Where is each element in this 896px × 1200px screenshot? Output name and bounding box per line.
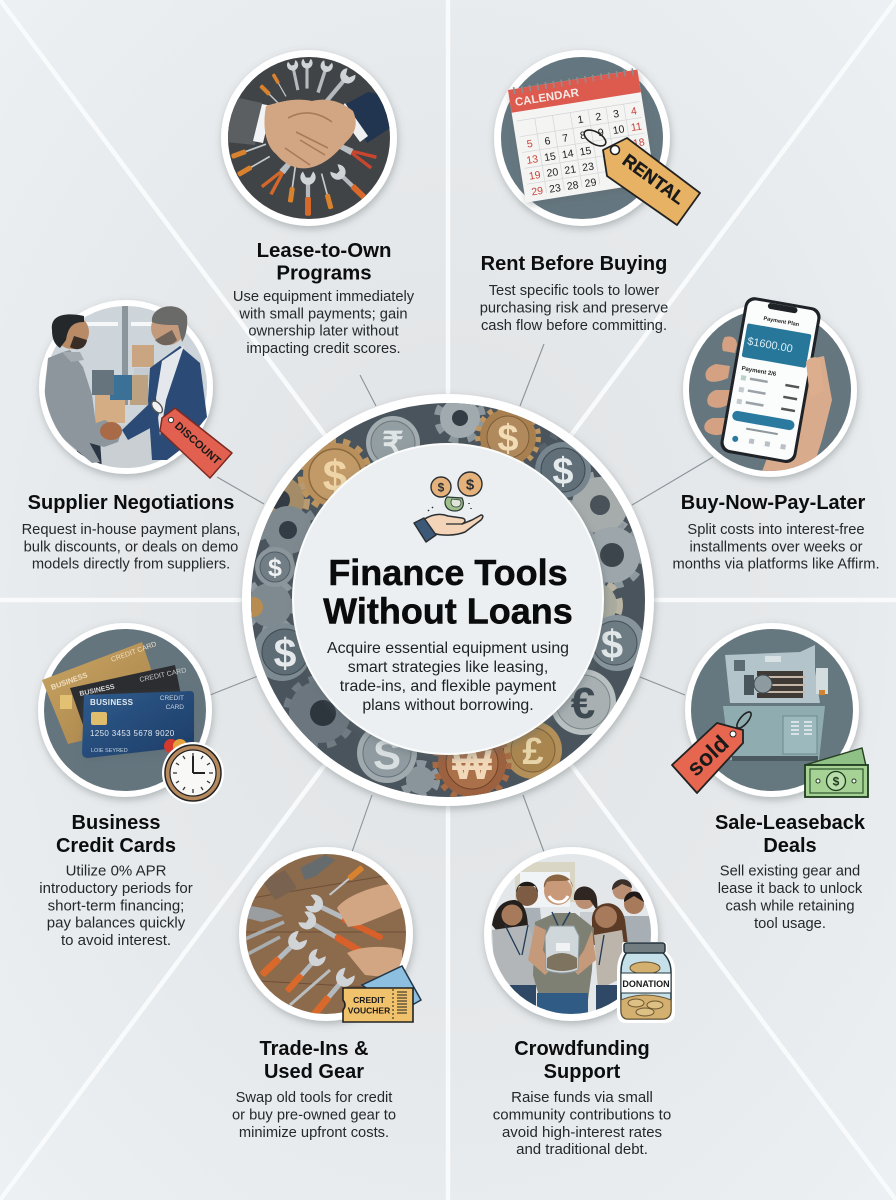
heading: Buy-Now-Pay-Later: [681, 492, 865, 514]
description: and traditional debt.: [516, 1141, 648, 1158]
calendar: 20: [546, 166, 559, 180]
description: Use equipment immediately: [233, 289, 415, 305]
calendar: 21: [564, 163, 577, 177]
heading: Supplier Negotiations: [28, 492, 234, 514]
photo: stacked credit cards with clock: [38, 623, 224, 804]
coins: $: [274, 630, 297, 676]
blue card: BUSINESS: [90, 698, 134, 707]
blue card: 1250 3453 5678 9020: [90, 729, 175, 738]
coins: $: [268, 554, 282, 582]
description: Raise funds via small: [511, 1089, 653, 1106]
description: ownership later without: [248, 324, 399, 340]
calendar: 18: [632, 136, 646, 150]
calendar: 29: [531, 185, 544, 199]
blue card: [82, 691, 194, 758]
description: Split costs into interest-free: [687, 522, 865, 538]
panel: buy-now-pay-later: [632, 296, 880, 573]
coins: ₩: [452, 741, 492, 788]
photo: used tools on wood with voucher: [239, 847, 421, 1025]
main man: [533, 913, 594, 1000]
description: lease it back to unlock: [718, 881, 863, 897]
icon: hand with falling coins: [414, 472, 483, 542]
description: models directly from suppliers.: [32, 557, 230, 573]
coins: £: [522, 731, 544, 773]
calendar: 8: [579, 129, 587, 142]
description: Request in-house payment plans,: [22, 522, 240, 538]
donation jar: DONATION: [622, 979, 670, 989]
coins: $: [601, 623, 623, 667]
icon: hand with falling coins: $: [466, 476, 475, 494]
photo: phone with payment app in a hand: [683, 296, 857, 477]
calendar: CALENDAR: [514, 87, 580, 109]
description: Test specific tools to lower: [489, 283, 659, 299]
calendar: [508, 68, 655, 203]
blue card: CARD: [166, 704, 184, 711]
phone: [719, 296, 822, 465]
discount tag: DISCOUNT: [172, 420, 223, 468]
description: impacting credit scores.: [246, 341, 401, 357]
calendar: 3: [612, 108, 620, 121]
description: minimize upfront costs.: [239, 1125, 389, 1141]
calendar: 9: [597, 127, 605, 139]
calendar: 4: [630, 105, 638, 118]
description: cash while retaining: [726, 898, 854, 914]
coins: $: [552, 451, 574, 493]
subtitle: trade-ins, and flexible payment: [340, 678, 557, 695]
heading: Sale-Leaseback: [715, 812, 866, 834]
phone: $1600.00: [746, 336, 794, 355]
calendar: 23: [581, 161, 595, 174]
photo: two men shaking hands in a warehouse: [39, 300, 232, 478]
center hub: [242, 394, 654, 806]
calendar: 1: [577, 114, 585, 126]
black card: [70, 665, 187, 745]
heading: Lease-to-Own: [257, 240, 391, 262]
description: purchasing risk and preserve: [480, 300, 668, 316]
calendar: 19: [528, 169, 542, 183]
description: avoid high-interest rates: [502, 1124, 662, 1141]
credit voucher: CREDIT: [353, 995, 386, 1005]
calendar: 23: [548, 182, 562, 196]
calendar: 14: [561, 148, 575, 161]
subtitle: plans without borrowing.: [362, 697, 534, 714]
right woman: [592, 903, 628, 945]
clock: [162, 742, 224, 804]
description: Sell existing gear and: [720, 864, 860, 880]
description: introductory periods for: [39, 880, 193, 897]
gears and coins ring: [243, 396, 646, 800]
heading: Trade-Ins &: [260, 1038, 368, 1060]
coins: ₹: [382, 426, 404, 464]
description: with small payments; gain: [238, 306, 408, 322]
phone: Payment Plan: [763, 316, 800, 328]
calendar: 15: [543, 150, 557, 164]
heading: Deals: [763, 835, 817, 857]
heading: Credit Cards: [56, 835, 176, 857]
description: cash flow before committing.: [481, 318, 667, 334]
coins: €: [571, 679, 595, 728]
subtitle: smart strategies like leasing,: [348, 659, 548, 676]
description: Utilize 0% APR: [66, 862, 167, 880]
description: Swap old tools for credit: [236, 1090, 392, 1106]
subtitle: Acquire essential equipment using: [327, 640, 569, 657]
credit voucher: VOUCHER: [348, 1006, 390, 1016]
heading: Rent Before Buying: [481, 253, 667, 275]
blue card: LOIE SEYRED: [91, 748, 128, 754]
phone: Payment 2/6: [741, 366, 777, 378]
heading: Programs: [276, 262, 372, 284]
donation jar: [617, 942, 675, 1023]
heading: Crowdfunding: [514, 1038, 650, 1060]
cash: [805, 748, 868, 797]
calendar: 29: [584, 176, 597, 190]
center disc: [293, 444, 603, 754]
blue card: CREDIT: [160, 695, 184, 702]
left woman: [492, 900, 528, 930]
heading: Support: [544, 1061, 621, 1083]
calendar: 15: [579, 145, 592, 158]
calendar: 13: [526, 153, 539, 167]
machine: [723, 645, 828, 761]
panel: lease-to-own programs: [221, 50, 415, 406]
panel: rent before buying: [480, 50, 700, 406]
sold tag: sold: [681, 730, 734, 781]
description: months via platforms like Affirm.: [672, 557, 880, 573]
money jar: [545, 926, 579, 973]
cash: $: [833, 774, 840, 788]
calendar: 2: [595, 111, 602, 124]
calendar: 28: [566, 179, 580, 193]
coins: $: [497, 418, 519, 460]
gold card: BUSINESS: [50, 670, 89, 692]
back people: [516, 884, 538, 906]
description: to avoid interest.: [61, 932, 171, 949]
description: tool usage.: [754, 916, 826, 932]
description: community contributions to: [493, 1106, 671, 1123]
heading: Used Gear: [264, 1061, 364, 1083]
gold card: [42, 641, 168, 744]
panel: trade-ins and used gear: [232, 795, 421, 1141]
panel: sale-leaseback deals: [640, 623, 868, 932]
panel: supplier negotiations: [22, 300, 264, 573]
photo: calendar with rental tag: [494, 50, 700, 226]
sold tag: [672, 710, 753, 793]
calendar: 11: [630, 121, 643, 134]
panel: business credit cards: [38, 623, 258, 949]
discount tag: [149, 399, 232, 478]
heading: Business: [72, 812, 160, 834]
black card: BUSINESS: [79, 684, 116, 698]
photo: machine with sold tag and cash: [672, 623, 868, 797]
rental tag: RENTAL: [619, 150, 688, 208]
description: installments over weeks or: [689, 539, 863, 555]
calendar: 6: [544, 135, 552, 148]
photo: handshake surrounded by tools: [221, 50, 397, 226]
coins: S: [373, 731, 401, 778]
description: or buy pre-owned gear to: [232, 1108, 396, 1124]
credit voucher: [343, 966, 421, 1022]
title: Finance Tools: [328, 552, 568, 593]
panel: crowdfunding support: [484, 795, 675, 1158]
gold card: CREDIT CARD: [110, 641, 158, 664]
photo: smiling group holding a coin jar: [484, 847, 675, 1025]
icon: hand with falling coins: $: [438, 480, 445, 494]
coins: $: [323, 452, 347, 501]
calendar: 10: [612, 123, 626, 137]
description: bulk discounts, or deals on demo: [24, 539, 238, 555]
description: pay balances quickly: [47, 915, 186, 932]
title: Without Loans: [323, 590, 573, 632]
black card: CREDIT CARD: [139, 667, 187, 684]
calendar: 7: [561, 132, 569, 145]
rental tag: [582, 127, 700, 225]
calendar: 5: [526, 138, 534, 151]
coins: [253, 407, 645, 799]
description: short-term financing;: [48, 897, 184, 914]
